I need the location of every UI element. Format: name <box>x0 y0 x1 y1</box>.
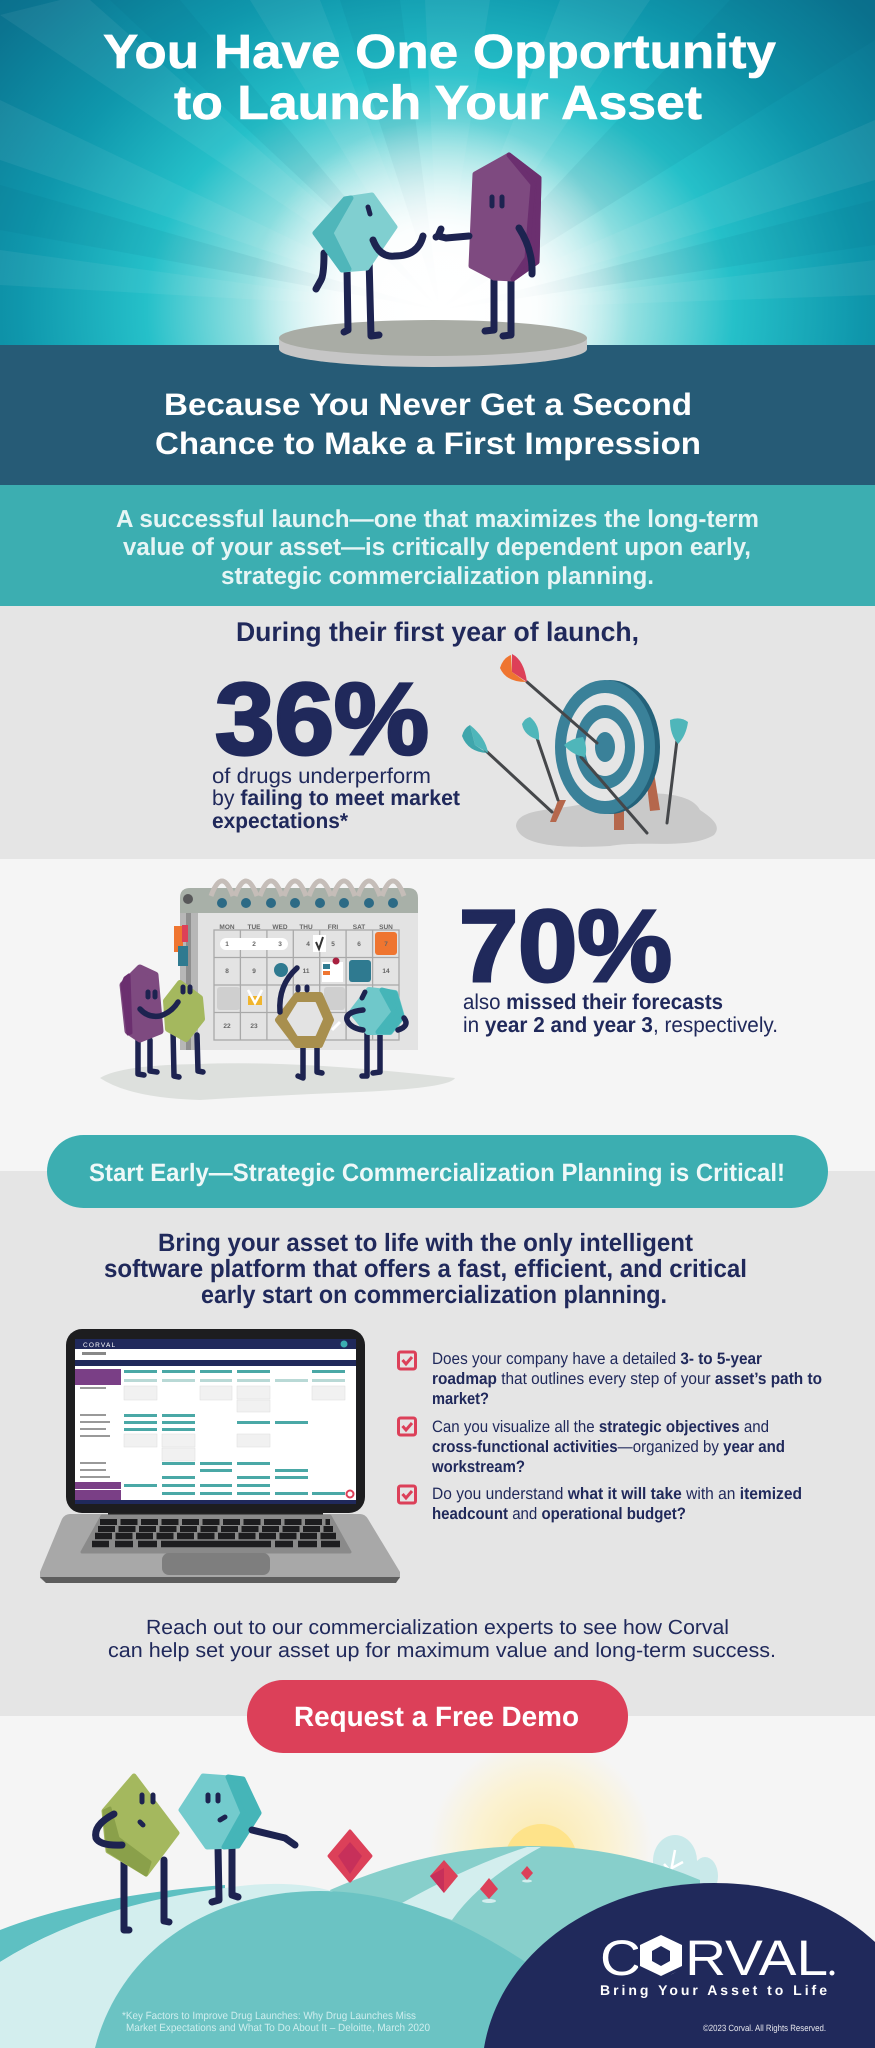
icon: teal character pointing <box>181 1776 295 1902</box>
panel: footer background <box>0 1716 875 2048</box>
icon: calendar with characters: MON <box>219 924 235 931</box>
icon: calendar with characters: WED <box>272 924 288 931</box>
icon: calendar with characters: 14 <box>382 968 390 975</box>
stat: 70%: also missed their forecasts <box>463 990 723 1014</box>
checklist <box>398 1350 822 1523</box>
call to action text: Reach out to our commercialization experts to see how Corval <box>146 1616 729 1639</box>
platform description: software platform that offers a fast, efficient, and critical <box>104 1255 747 1283</box>
icon: calendar with characters: 4 <box>306 941 310 948</box>
checklist item 2: Can you visualize all the strategic objectives and <box>432 1418 769 1436</box>
icon: calendar with characters: THU <box>299 924 313 931</box>
icon: calendar with characters: 2 <box>252 941 256 948</box>
icon: purple character shaking hands <box>436 155 539 336</box>
checklist item 1: Does your company have a detailed 3- to 5-year <box>432 1350 763 1368</box>
icon: path markers <box>329 1831 533 1903</box>
heading: during first year: During their first year of launch, <box>236 617 639 647</box>
icon: calendar with characters: 5 <box>331 941 335 948</box>
icon: calendar with characters: TUE <box>248 924 261 931</box>
icon: calendar with characters: 3 <box>278 941 282 948</box>
call to action text <box>108 1616 776 1662</box>
icon: calendar with characters <box>100 881 455 1100</box>
checklist item 1: market? <box>432 1390 489 1408</box>
subtitle: Because You Never Get a Second <box>164 387 692 422</box>
platform description: Bring your asset to life with the only intelligent <box>158 1229 694 1257</box>
icon: platform <box>279 320 587 367</box>
platform description: early start on commercialization planning. <box>201 1281 667 1309</box>
checklist item 2: cross-functional activities—organized by year and <box>432 1438 785 1456</box>
illustration: hills and road <box>0 1846 700 2048</box>
panel: navy logo hill <box>484 1883 875 2048</box>
title: You Have One Opportunity <box>103 26 776 79</box>
banner: start early pill: Start Early—Strategic Commercialization Planning is Critical! <box>89 1159 785 1187</box>
icon: calendar with characters: 22 <box>223 1023 231 1030</box>
subtitle <box>155 387 701 461</box>
footnote <box>122 2010 430 2034</box>
panel: gray first year section <box>0 606 875 859</box>
icon: calendar with characters: 23 <box>250 1023 258 1030</box>
icon: calendar with characters: 8 <box>225 968 229 975</box>
banner: start early pill <box>47 1135 828 1208</box>
button: request a free demo <box>247 1680 628 1753</box>
stat: 70% <box>459 889 778 1037</box>
button: request a free demo: Request a Free Demo <box>294 1701 579 1732</box>
icon: calendar with characters: FRI <box>328 924 338 931</box>
stat: 36%: expectations* <box>212 809 349 833</box>
icon: calendar with characters: 6 <box>357 941 361 948</box>
icon: calendar with characters: 11 <box>303 968 310 975</box>
icon: laptop with roadmap screen: CORVAL <box>83 1342 116 1349</box>
footnote: *Key Factors to Improve Drug Launches: Why Drug Launches Miss <box>122 2010 416 2022</box>
icon: green character <box>96 1776 177 1930</box>
icon: calendar with characters: 25 <box>302 1023 310 1030</box>
icon: calendar with characters: 9 <box>252 968 256 975</box>
icon: calendar with characters: SAT <box>353 924 365 931</box>
platform description <box>104 1229 747 1309</box>
stat: 70%: in year 2 and year 3, respectively. <box>463 1013 778 1037</box>
stat: 36% <box>212 662 460 833</box>
intro paragraph: strategic commercialization planning. <box>221 563 654 590</box>
stat: 36%: 36% <box>215 662 429 776</box>
intro paragraph: value of your asset—is critically dependent upon early, <box>123 534 751 561</box>
icon: rising sun <box>429 1738 653 1962</box>
panel: gray platform section <box>0 1171 875 1716</box>
title: to Launch Your Asset <box>174 77 702 130</box>
panel: light forecast section <box>0 859 875 1171</box>
checklist item 2: workstream? <box>431 1458 525 1476</box>
checklist item 1: roadmap that outlines every step of your asset’s path to <box>432 1370 822 1388</box>
logo: Corval: Bring Your Asset to Life <box>600 1982 827 1998</box>
checklist item 3: headcount and operational budget? <box>432 1505 686 1523</box>
intro paragraph <box>116 506 759 590</box>
icon: trees <box>653 1835 718 1898</box>
footnote: Market Expectations and What To Do About It – Deloitte, March 2020 <box>126 2022 430 2034</box>
stat: 36%: of drugs underperform <box>212 764 431 788</box>
icon: calendar with characters: 1 <box>225 941 229 948</box>
panel: teal intro band <box>0 485 875 606</box>
copyright: ©2023 Corval. All Rights Reserved. <box>703 2023 826 2033</box>
icon: target with arrows <box>462 654 717 847</box>
title <box>103 26 776 130</box>
stat: 70%: 70% <box>459 889 672 1003</box>
checklist item 2 <box>398 1418 785 1476</box>
subtitle: Chance to Make a First Impression <box>155 426 701 461</box>
panel: dark subtitle band <box>0 345 875 485</box>
call to action text: can help set your asset up for maximum value and long-term success. <box>108 1639 776 1662</box>
icon: teal character shaking hands <box>315 195 423 336</box>
panel: hero background <box>0 0 875 345</box>
icon: laptop with roadmap screen <box>40 1329 400 1583</box>
icon: calendar with characters: 7 <box>384 941 388 948</box>
intro paragraph: A successful launch—one that maximizes the long-term <box>116 506 759 533</box>
logo: Corval: CORVAL <box>600 1930 828 1986</box>
checklist item 1 <box>398 1350 822 1408</box>
checklist item 3 <box>398 1485 802 1523</box>
checklist item 3: Do you understand what it will take with an itemized <box>432 1485 802 1503</box>
icon: calendar with characters: SUN <box>379 924 393 931</box>
stat: 36%: by failing to meet market <box>212 786 460 810</box>
